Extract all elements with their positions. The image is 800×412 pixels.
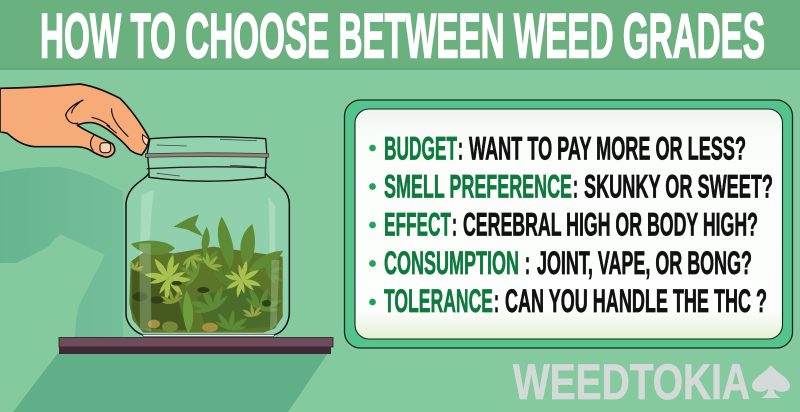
list item: smell preference: : [573, 168, 578, 204]
icon: jar neck and threads [142, 137, 275, 337]
list item: consumption: CONSUMPTION [384, 245, 519, 281]
shelf [59, 338, 333, 354]
icon: cannabis leaves in jar [128, 214, 288, 333]
list item: consumption: : [525, 245, 530, 281]
list item: effect: : [452, 206, 457, 242]
hand and jar illustration [0, 84, 289, 337]
icon: spade [752, 365, 790, 398]
list item: effect [369, 206, 758, 242]
header band [0, 0, 800, 70]
list item: smell preference: SMELL PREFERENCE [384, 168, 572, 204]
list item: budget: : [458, 130, 463, 166]
list item: tolerance: : [494, 283, 499, 319]
panel: checklist [344, 100, 792, 348]
shelf and hand shadows [0, 167, 328, 412]
tall leaf blades [131, 214, 283, 333]
icon: hand gripping jar [0, 84, 149, 157]
list item: tolerance [369, 283, 767, 319]
list item: budget: BUDGET [384, 130, 457, 166]
icon: jar body [126, 173, 289, 335]
list item: tolerance: TOLERANCE [384, 283, 493, 319]
list item: budget [369, 130, 746, 166]
list item: consumption [369, 245, 752, 281]
list item: effect: EFFECT [384, 206, 451, 242]
